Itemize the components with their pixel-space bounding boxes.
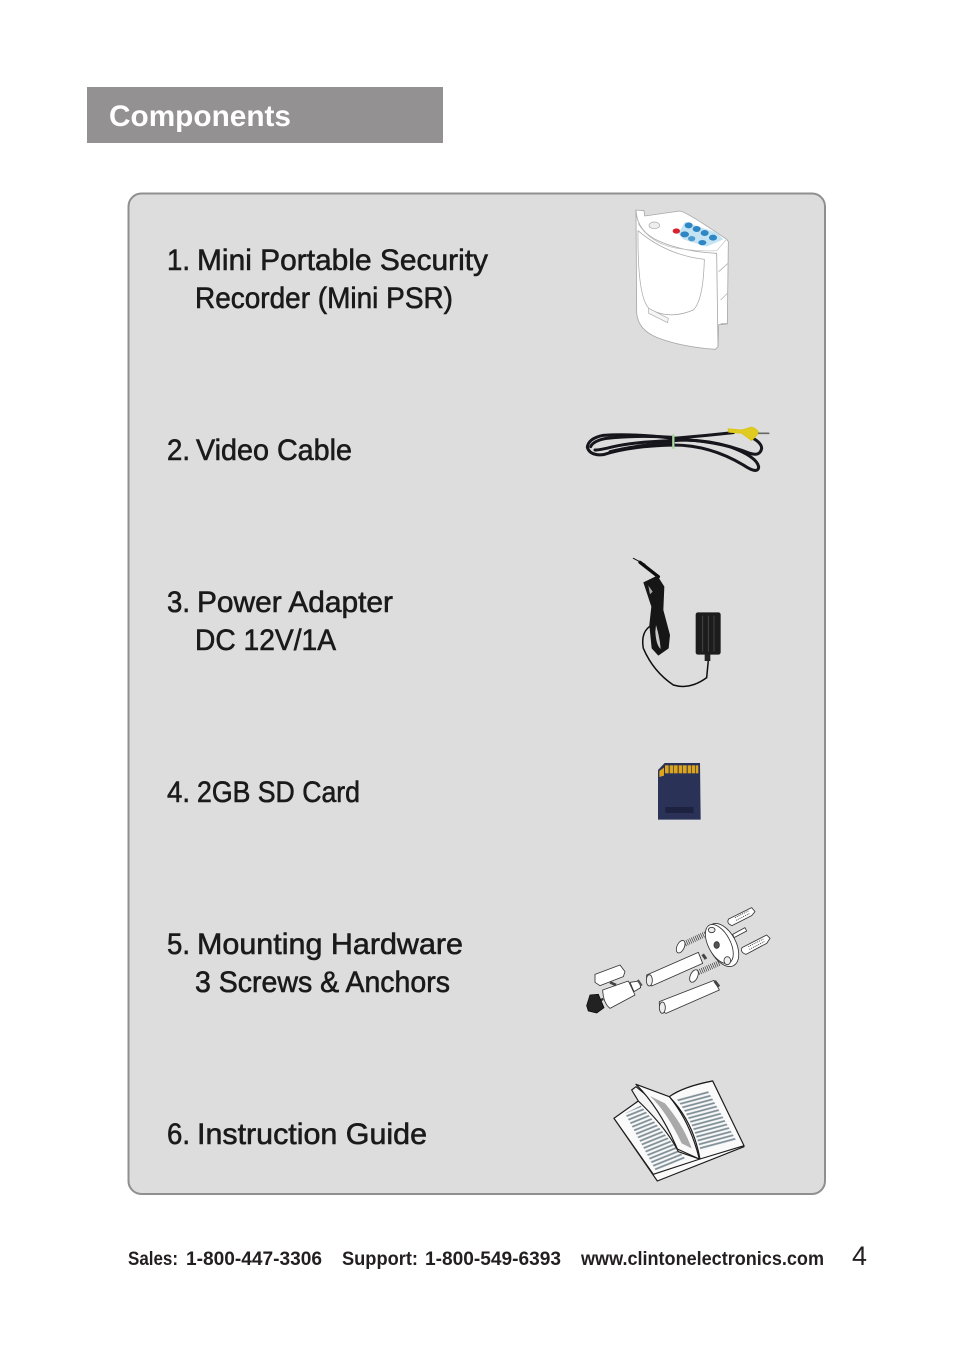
footer contact line: 1-800-447-3306 [186, 1249, 322, 1270]
footer contact line: www.clintonelectronics.com [580, 1249, 824, 1270]
item 5 label: Mounting Hardware [197, 928, 463, 961]
item 1 label [167, 244, 488, 315]
item 1 label: Mini Portable Security [197, 244, 488, 277]
icon: video cable [587, 427, 769, 470]
heading banner: Components [109, 100, 291, 133]
icon: SD card [658, 763, 701, 820]
item 5 label: 3 Screws & Anchors [195, 966, 450, 999]
icon: recorder device [636, 210, 728, 349]
item 1 label: Recorder (Mini PSR) [195, 282, 453, 315]
item 5 label [167, 928, 463, 999]
wall disc [700, 918, 745, 972]
icon: instruction guide [614, 1081, 744, 1181]
item 3 label: Power Adapter [197, 586, 393, 619]
item 4 label: 4. [167, 776, 190, 809]
icon: power adapter [633, 558, 721, 686]
footer contact line [128, 1249, 824, 1270]
item 5 label: 5. [167, 928, 190, 961]
item 6 label: Instruction Guide [197, 1118, 427, 1151]
item 6 label: 6. [167, 1118, 190, 1151]
item 3 label: 3. [167, 586, 190, 619]
item 4 label: 2GB SD Card [197, 776, 360, 809]
item 2 label: 2. [167, 434, 190, 467]
footer contact line: 1-800-549-6393 [425, 1249, 561, 1270]
item 1 label: 1. [167, 244, 190, 277]
item 3 label: DC 12V/1A [195, 624, 336, 657]
panel: components list [128, 194, 825, 1194]
footer contact line: Sales: [128, 1249, 178, 1270]
footer contact line: Support: [342, 1249, 418, 1270]
item 3 label [167, 586, 393, 657]
page number: 4 [852, 1241, 867, 1271]
anchors [728, 908, 770, 954]
item 2 label: Video Cable [196, 434, 352, 467]
heading banner [87, 87, 443, 143]
icon: mounting hardware [587, 908, 770, 1013]
